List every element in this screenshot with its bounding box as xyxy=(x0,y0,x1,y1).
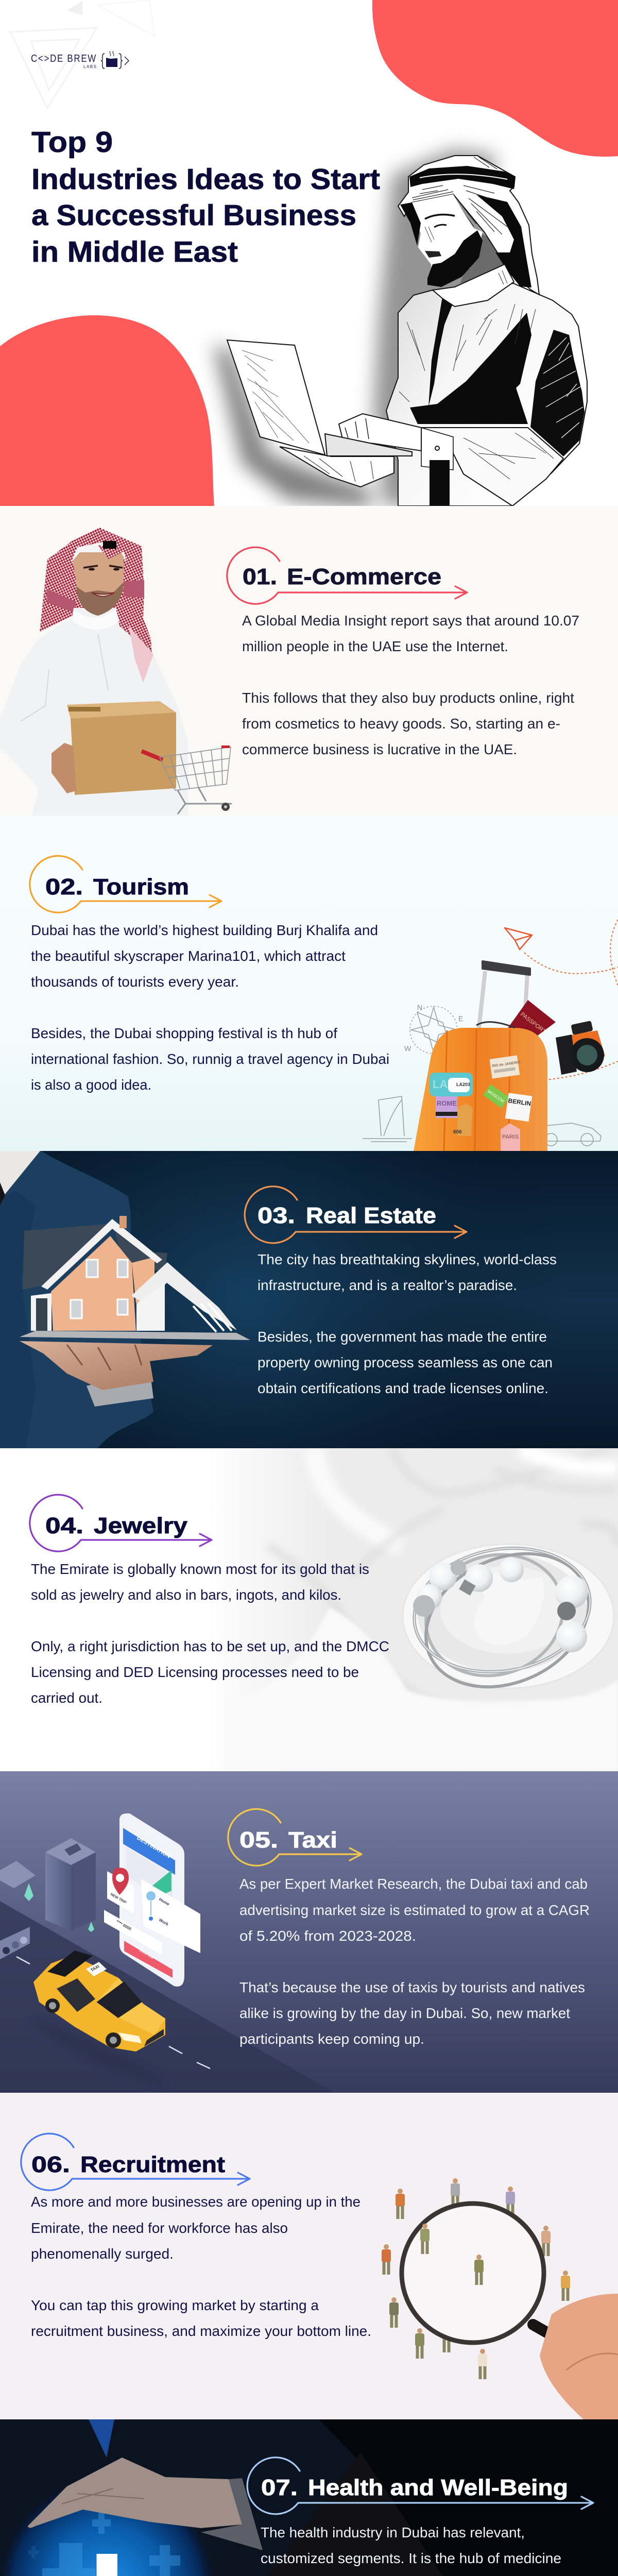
face xyxy=(72,547,124,616)
hand xyxy=(52,743,76,793)
text block: commerce business is lucrative in the UAE. xyxy=(242,741,517,757)
icon: faint triangles behind logo xyxy=(9,1,98,109)
face shadow xyxy=(400,202,421,246)
illustration: taxi app scene: Book now xyxy=(139,1949,154,1960)
text block: thousands of tourists every year. xyxy=(31,974,239,990)
title: in Middle East xyxy=(31,235,238,268)
head band xyxy=(409,166,515,189)
text block: obtain certifications and trade licenses online. xyxy=(258,1380,548,1396)
front gable xyxy=(131,1262,237,1330)
text block: This follows that they also buy products online, right xyxy=(242,690,574,706)
white cap xyxy=(71,542,127,563)
boat sketch xyxy=(363,1096,412,1142)
text block: As more and more businesses are opening up in the xyxy=(31,2194,360,2210)
bracelet rings xyxy=(404,1529,610,1712)
stubble xyxy=(76,582,124,616)
robe xyxy=(386,283,587,506)
text block: The Emirate is globally known most for its gold that is xyxy=(31,1561,369,1577)
shirt collar xyxy=(0,1151,40,1195)
crystal beads xyxy=(413,1560,576,1620)
panel: 01 e-commerce xyxy=(0,506,618,816)
roof trim xyxy=(41,1219,162,1290)
dark chest shading xyxy=(410,313,531,424)
text block xyxy=(261,2524,576,2576)
ticket card xyxy=(104,1910,162,1955)
passport xyxy=(505,1000,556,1043)
text block: Only, a right jurisdiction has to be set up, and the DMCC xyxy=(31,1638,389,1654)
text block: Licensing and DED Licensing processes need to be xyxy=(31,1664,359,1680)
text block: You can tap this growing market by starting a xyxy=(31,2297,319,2313)
sticker: MOSCOW xyxy=(483,1084,509,1108)
struts xyxy=(193,1303,232,1332)
neck xyxy=(460,233,505,283)
text block xyxy=(31,1561,389,1706)
sticker: luggage tag: 606 xyxy=(453,1129,462,1135)
paper plane xyxy=(505,928,532,950)
panel: 07 health and well-being xyxy=(0,2419,618,2576)
destination card xyxy=(141,1879,200,1953)
panel: 05 taxi xyxy=(0,1771,618,2093)
text block: The city has breathtaking skylines, world-class xyxy=(258,1251,557,1267)
lower hand xyxy=(280,447,394,487)
compass letters: W xyxy=(404,1044,411,1053)
phone xyxy=(119,1814,184,1987)
blue glow xyxy=(0,2476,217,2576)
dark sleeve xyxy=(530,330,585,456)
windows xyxy=(71,1260,128,1318)
white cross xyxy=(72,2554,143,2576)
sticker: PARIS: PARIS xyxy=(502,1134,519,1140)
photo: magnifier and figurines xyxy=(382,2178,618,2419)
text block: is also a good idea. xyxy=(31,1077,151,1093)
text block: Emirate, the need for workforce has also xyxy=(31,2220,288,2236)
head wrap xyxy=(398,156,539,295)
illustration: taxi app scene: Home xyxy=(158,1897,170,1907)
taxi: TAXI xyxy=(90,1964,100,1973)
heading: 05. Taxi xyxy=(228,1809,362,1866)
illustration: taxi app scene: **** 0000 xyxy=(115,1919,132,1931)
sticker: BERLIN xyxy=(505,1093,532,1122)
illustration: taxi app scene xyxy=(0,1814,335,2093)
upper hand xyxy=(28,2458,242,2528)
dashed flight paths xyxy=(524,920,618,1080)
sticker: RIO: RIO de JANEIRO xyxy=(492,1061,521,1068)
white lower fold xyxy=(227,1607,618,1771)
text block: infrastructure, and is a realtor’s paradise. xyxy=(258,1277,517,1293)
panel: 03 real estate xyxy=(0,1151,618,1448)
tie xyxy=(89,2419,114,2458)
translucent crosses xyxy=(18,2512,180,2576)
car sketch xyxy=(540,1123,601,1141)
logo: C<>DE BREW xyxy=(31,53,97,64)
illustration: taxi app scene: DESTINATION xyxy=(135,1835,171,1860)
hand on keyboard xyxy=(339,414,421,451)
logo xyxy=(31,51,129,69)
logo: LABS xyxy=(83,64,97,69)
robe hatching xyxy=(399,304,536,402)
placket xyxy=(428,299,452,405)
taxi roof sign xyxy=(86,1962,107,1976)
trees xyxy=(24,1883,33,1901)
text block xyxy=(258,1251,557,1396)
compass letters: E xyxy=(458,1014,463,1023)
text block: international fashion. So, runnig a travel agency in Dubai xyxy=(31,1051,389,1067)
taxi xyxy=(29,1951,166,2090)
text block: from cosmetics to heavy goods. So, starting an e- xyxy=(242,716,560,732)
sticker: RIO xyxy=(489,1055,522,1079)
heading: 03. Real Estate: Real Estate xyxy=(306,1203,436,1228)
scarf xyxy=(40,528,153,683)
decorative blob: bottom left xyxy=(0,315,214,506)
scarf fold on forehead xyxy=(98,545,126,559)
road xyxy=(0,1901,335,2093)
pearls xyxy=(416,1557,588,1652)
text block: sold as jewelry and also in bars, ingots, and kilos. xyxy=(31,1587,341,1603)
text block: million people in the UAE use the Internet. xyxy=(242,638,508,654)
scarf tail xyxy=(129,626,153,683)
figurines xyxy=(396,2189,405,2219)
heading: 07. Health and Well-Being xyxy=(247,2458,593,2514)
heading: 04. Jewelry xyxy=(30,1495,212,1551)
text block: That’s because the use of taxis by tourists and natives xyxy=(239,1979,585,1995)
decorative blob: top right xyxy=(372,0,618,157)
title: a Successful Business xyxy=(31,199,356,232)
heading: 06. Recruitment xyxy=(21,2133,250,2190)
laptop screen xyxy=(227,340,325,455)
heading: 07. Health and Well-Being: 07. xyxy=(261,2475,298,2500)
brow and eye xyxy=(425,215,455,219)
compass letters xyxy=(404,1003,463,1053)
suitcase body xyxy=(414,1028,547,1151)
book button xyxy=(124,1941,173,1978)
suit xyxy=(0,2419,371,2576)
hand xyxy=(20,1341,213,1390)
sticker: LA: LA xyxy=(433,1078,448,1091)
sticker: BERLIN: BERLIN xyxy=(508,1097,531,1107)
text block: recruitment business, and maximize your bottom line. xyxy=(31,2323,371,2339)
illustration: travel suitcase xyxy=(363,920,618,1151)
collar xyxy=(433,264,514,307)
text block xyxy=(239,1876,590,2047)
sticker: ROME: ROME xyxy=(437,1099,457,1107)
hand xyxy=(540,2294,618,2419)
heading: 03. Real Estate xyxy=(245,1187,467,1243)
tower xyxy=(45,1852,71,1930)
text block: the beautiful skyscraper Marina101, which attract xyxy=(31,948,346,964)
illustration: man with laptop xyxy=(214,149,587,507)
laptop keyboard base xyxy=(325,434,412,456)
heading: 05. Taxi: Taxi xyxy=(288,1827,337,1853)
compass letters: N xyxy=(417,1003,422,1011)
cardboard box xyxy=(67,701,176,795)
text block: Besides, the government has made the entire xyxy=(258,1329,547,1345)
sticker: luggage tag xyxy=(453,1104,473,1136)
compass xyxy=(410,1006,457,1054)
photo: hands around medical cross xyxy=(0,2419,443,2576)
silk folds xyxy=(268,1443,618,1705)
figure shadow xyxy=(214,149,494,507)
phone screen header xyxy=(123,1828,175,1875)
photo: man holding box with shopping cart xyxy=(0,528,232,816)
magnifier handle xyxy=(533,2325,569,2345)
illustration: taxi app scene: NEW TRIP xyxy=(110,1893,127,1905)
text block: Besides, the Dubai shopping festival is th hub of xyxy=(31,1025,337,1041)
text block: phenomenally surged. xyxy=(31,2246,174,2262)
title: Industries Ideas to Start xyxy=(31,163,380,196)
panel: 04 jewelry xyxy=(0,1443,618,1771)
suit xyxy=(0,1151,153,1448)
text block xyxy=(31,2194,371,2339)
eyes and smile xyxy=(83,566,123,568)
robe xyxy=(0,608,188,816)
peach walls xyxy=(51,1236,136,1331)
sticker: PARIS xyxy=(501,1123,520,1151)
text block: A Global Media Insight report says that around 10.07 xyxy=(242,613,579,629)
text block: carried out. xyxy=(31,1690,102,1706)
title xyxy=(31,126,380,268)
beard xyxy=(427,230,483,287)
luggage handle xyxy=(479,971,527,1028)
text block: participants keep coming up. xyxy=(239,2031,424,2047)
phone map xyxy=(126,1847,173,1906)
heading: 01. E-Commerce: 01. xyxy=(243,564,277,589)
heading: 01. E-Commerce: E-Commerce xyxy=(287,564,441,589)
sticker: LA: LA203 xyxy=(456,1082,470,1087)
magnifier lens xyxy=(402,2204,544,2343)
heading: 02. Tourism xyxy=(30,856,221,912)
sticker: ROME xyxy=(436,1096,457,1118)
pin card xyxy=(107,1871,134,1914)
heading: 02. Tourism: Tourism xyxy=(93,874,189,900)
photo: suit and hand holding a house xyxy=(0,1151,250,1448)
text block: The health industry in Dubai has relevant, xyxy=(261,2524,525,2540)
text block: Dubai has the world’s highest building Burj Khalifa and xyxy=(31,922,378,938)
dish xyxy=(403,1544,614,1688)
robe centre strip xyxy=(430,460,450,506)
text block: advertising market size is estimated to grow at a CAGR xyxy=(239,1902,590,1918)
illustration: travel suitcase: PASSPORT xyxy=(519,1011,547,1035)
heading: 04. Jewelry: 04. xyxy=(45,1513,83,1538)
low building xyxy=(0,1861,36,1897)
text block: customized segments. It is the hub of medicine xyxy=(261,2550,561,2566)
map pin xyxy=(112,1868,129,1895)
traffic light xyxy=(0,1927,30,1959)
title: Top 9 xyxy=(31,126,113,159)
shopping cart xyxy=(160,747,232,814)
road dashes xyxy=(16,1957,210,2069)
sticker: MOSCOW: MOSCOW xyxy=(487,1089,505,1104)
cuff xyxy=(87,1370,153,1406)
black drape xyxy=(476,195,531,287)
heading: 05. Taxi: 05. xyxy=(239,1827,278,1853)
dark roof xyxy=(23,1224,112,1290)
heading: 02. Tourism: 02. xyxy=(45,874,83,900)
panel: 02 tourism xyxy=(0,816,618,1151)
heading: 01. E-Commerce xyxy=(227,547,467,604)
panel: 06 recruitment xyxy=(0,2093,618,2419)
camera xyxy=(556,1021,605,1075)
panel: hero xyxy=(0,0,618,507)
forearm and cuff xyxy=(421,428,563,506)
head cloth hatching xyxy=(412,157,507,234)
face xyxy=(412,194,483,282)
photo: silk cloth and pearl bracelet xyxy=(211,1443,618,1771)
text block: property owning process seamless as one can xyxy=(258,1354,553,1370)
house platform xyxy=(20,1331,250,1340)
moustache xyxy=(425,251,441,258)
text block: alike is growing by the day in Dubai. So, new market xyxy=(239,2005,570,2021)
text block xyxy=(31,922,389,1093)
agal block xyxy=(103,541,116,549)
text block: As per Expert Market Research, the Dubai taxi and cab xyxy=(239,1876,588,1892)
heading: 04. Jewelry: Jewelry xyxy=(94,1513,188,1538)
scarf stripes xyxy=(46,580,144,613)
heading: 06. Recruitment: 06. xyxy=(31,2152,70,2177)
heading: 03. Real Estate: 03. xyxy=(258,1203,295,1228)
swan ornament xyxy=(474,1572,544,1645)
heading: 06. Recruitment: Recruitment xyxy=(80,2152,225,2177)
cart handle xyxy=(142,751,163,760)
text block: of 5.20% from 2023-2028. xyxy=(239,1928,416,1944)
text block xyxy=(242,613,579,757)
sticker: LA xyxy=(430,1073,473,1096)
heading: 07. Health and Well-Being: Health and Well-Being xyxy=(308,2475,568,2500)
illustration: taxi app scene: Work xyxy=(158,1918,169,1927)
